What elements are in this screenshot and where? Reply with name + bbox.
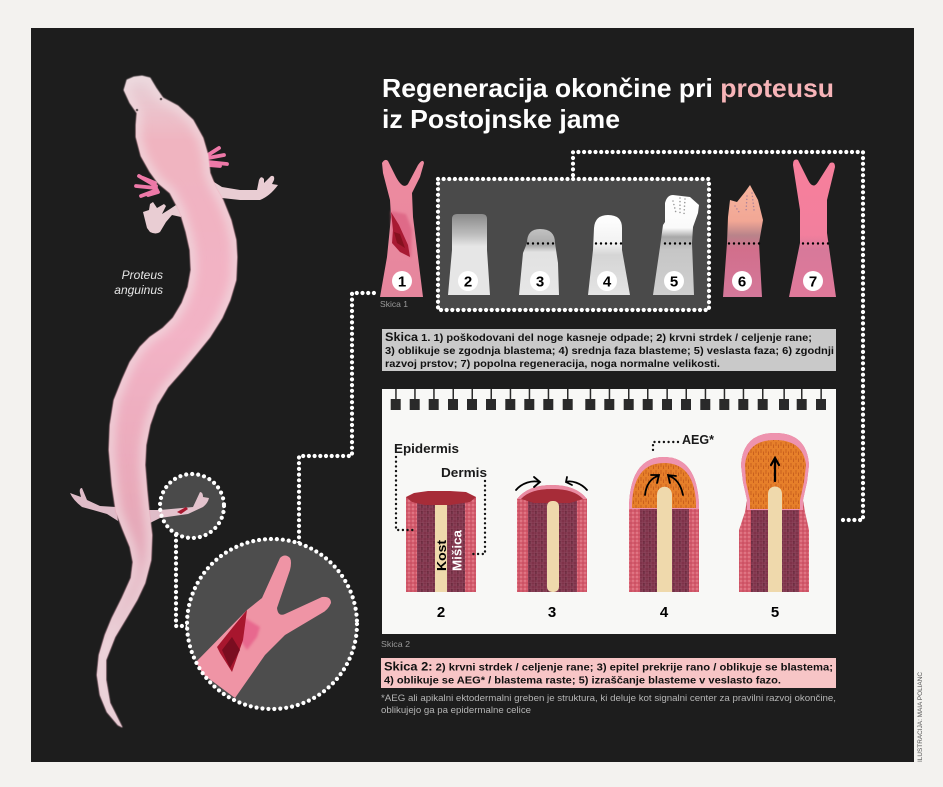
stage 2 limb <box>448 214 490 295</box>
anatomy labels: Epidermis <box>394 442 459 456</box>
title <box>382 73 834 134</box>
stage 1 limb <box>380 160 424 297</box>
panel: skica 1 limb stages <box>380 160 836 310</box>
diagram limb 5 <box>739 433 809 592</box>
diagram numbers: 3 <box>548 604 556 621</box>
species name: Proteus <box>122 268 163 282</box>
proteus salamander illustration <box>70 76 278 727</box>
front limbs <box>143 172 278 234</box>
stage numbers: 7 <box>809 274 817 290</box>
diagram limb 4 <box>629 457 699 592</box>
eyes <box>136 98 162 111</box>
stage numbers: 4 <box>603 274 612 290</box>
anatomy labels: Kost <box>435 539 449 571</box>
caption: skica 2: 4) oblikuje se AEG* / blastema raste; 5) izraščanje blasteme v veslasto fazo. <box>384 674 781 686</box>
label: skica 2: Skica 2 <box>381 639 410 649</box>
body soft edge highlight <box>97 76 237 727</box>
stage numbers: 5 <box>670 274 678 290</box>
connector lines <box>176 152 863 626</box>
caption: skica 1: razvoj prstov; 7) popolna regeneracija, noga normalne velikosti. <box>385 358 720 370</box>
small magnifier circle <box>150 474 224 538</box>
panel: notebook sheet skica 2 <box>382 389 836 634</box>
stage 2-5 box <box>438 179 709 310</box>
anatomy labels <box>394 433 714 571</box>
caption: skica 1 <box>382 329 836 371</box>
stage numbers: 2 <box>464 274 472 290</box>
diagram numbers <box>437 604 779 621</box>
footnote <box>381 693 836 715</box>
growth arrows <box>516 458 779 495</box>
stage 6 limb <box>723 185 763 297</box>
stage numbers: 3 <box>536 274 544 290</box>
stage numbers: 1 <box>398 274 406 290</box>
footnote: oblikujejo ga pa epidermalne celice <box>381 705 531 715</box>
diagram numbers: 5 <box>771 604 779 621</box>
title: Regeneracija okončine pri proteusu <box>382 73 834 103</box>
caption: skica 2: Skica 2: 2) krvni strdek / celjenje rane; 3) epitel prekrije rano / oblikuje se blastema; <box>384 660 833 674</box>
stage numbers <box>392 271 823 291</box>
caption: skica 1: Skica 1. 1) poškodovani del noge kasneje odpade; 2) krvni strdek / celjenje rane; <box>385 330 812 344</box>
label: skica 1: Skica 1 <box>380 299 408 309</box>
stage 5 digit dots <box>673 198 685 215</box>
stage 7 limb <box>789 160 836 297</box>
caption: skica 1: 3) oblikuje se zgodnja blastema; 4) srednja faza blasteme; 5) veslasta faza; 6) zgodnji <box>385 345 834 357</box>
body <box>97 76 237 727</box>
diagram numbers: 2 <box>437 604 445 621</box>
diagram numbers: 4 <box>660 604 669 621</box>
stage 3 limb <box>519 229 559 295</box>
amputation level dotted markers <box>528 242 829 245</box>
anatomy labels: Dermis <box>441 466 487 480</box>
footnote: *AEG ali apikalni ektodermalni greben je struktura, ki deluje kot signalni center za pravilni razvoj okončine, <box>381 693 836 703</box>
hind limbs <box>70 488 209 523</box>
species name <box>114 268 163 297</box>
caption: skica 2 <box>381 658 836 688</box>
stage 5 limb <box>653 195 699 295</box>
anatomy labels: AEG* <box>682 433 714 447</box>
diagram limb 2 <box>406 491 476 592</box>
stage numbers: 6 <box>738 274 746 290</box>
title: iz Postojnske jame <box>382 104 620 134</box>
stage 4 limb <box>588 215 630 295</box>
notebook binding holes <box>391 389 826 410</box>
diagram limb 3 <box>517 485 587 592</box>
large magnifier circle: wounded limb <box>187 539 357 709</box>
species name: anguinus <box>114 283 163 297</box>
gills <box>136 148 227 196</box>
anatomy labels: Mišica <box>450 529 464 571</box>
label leader dots <box>396 442 678 554</box>
illustration credit: ILUSTRACIJA: MAIA POLIANC <box>917 672 924 762</box>
